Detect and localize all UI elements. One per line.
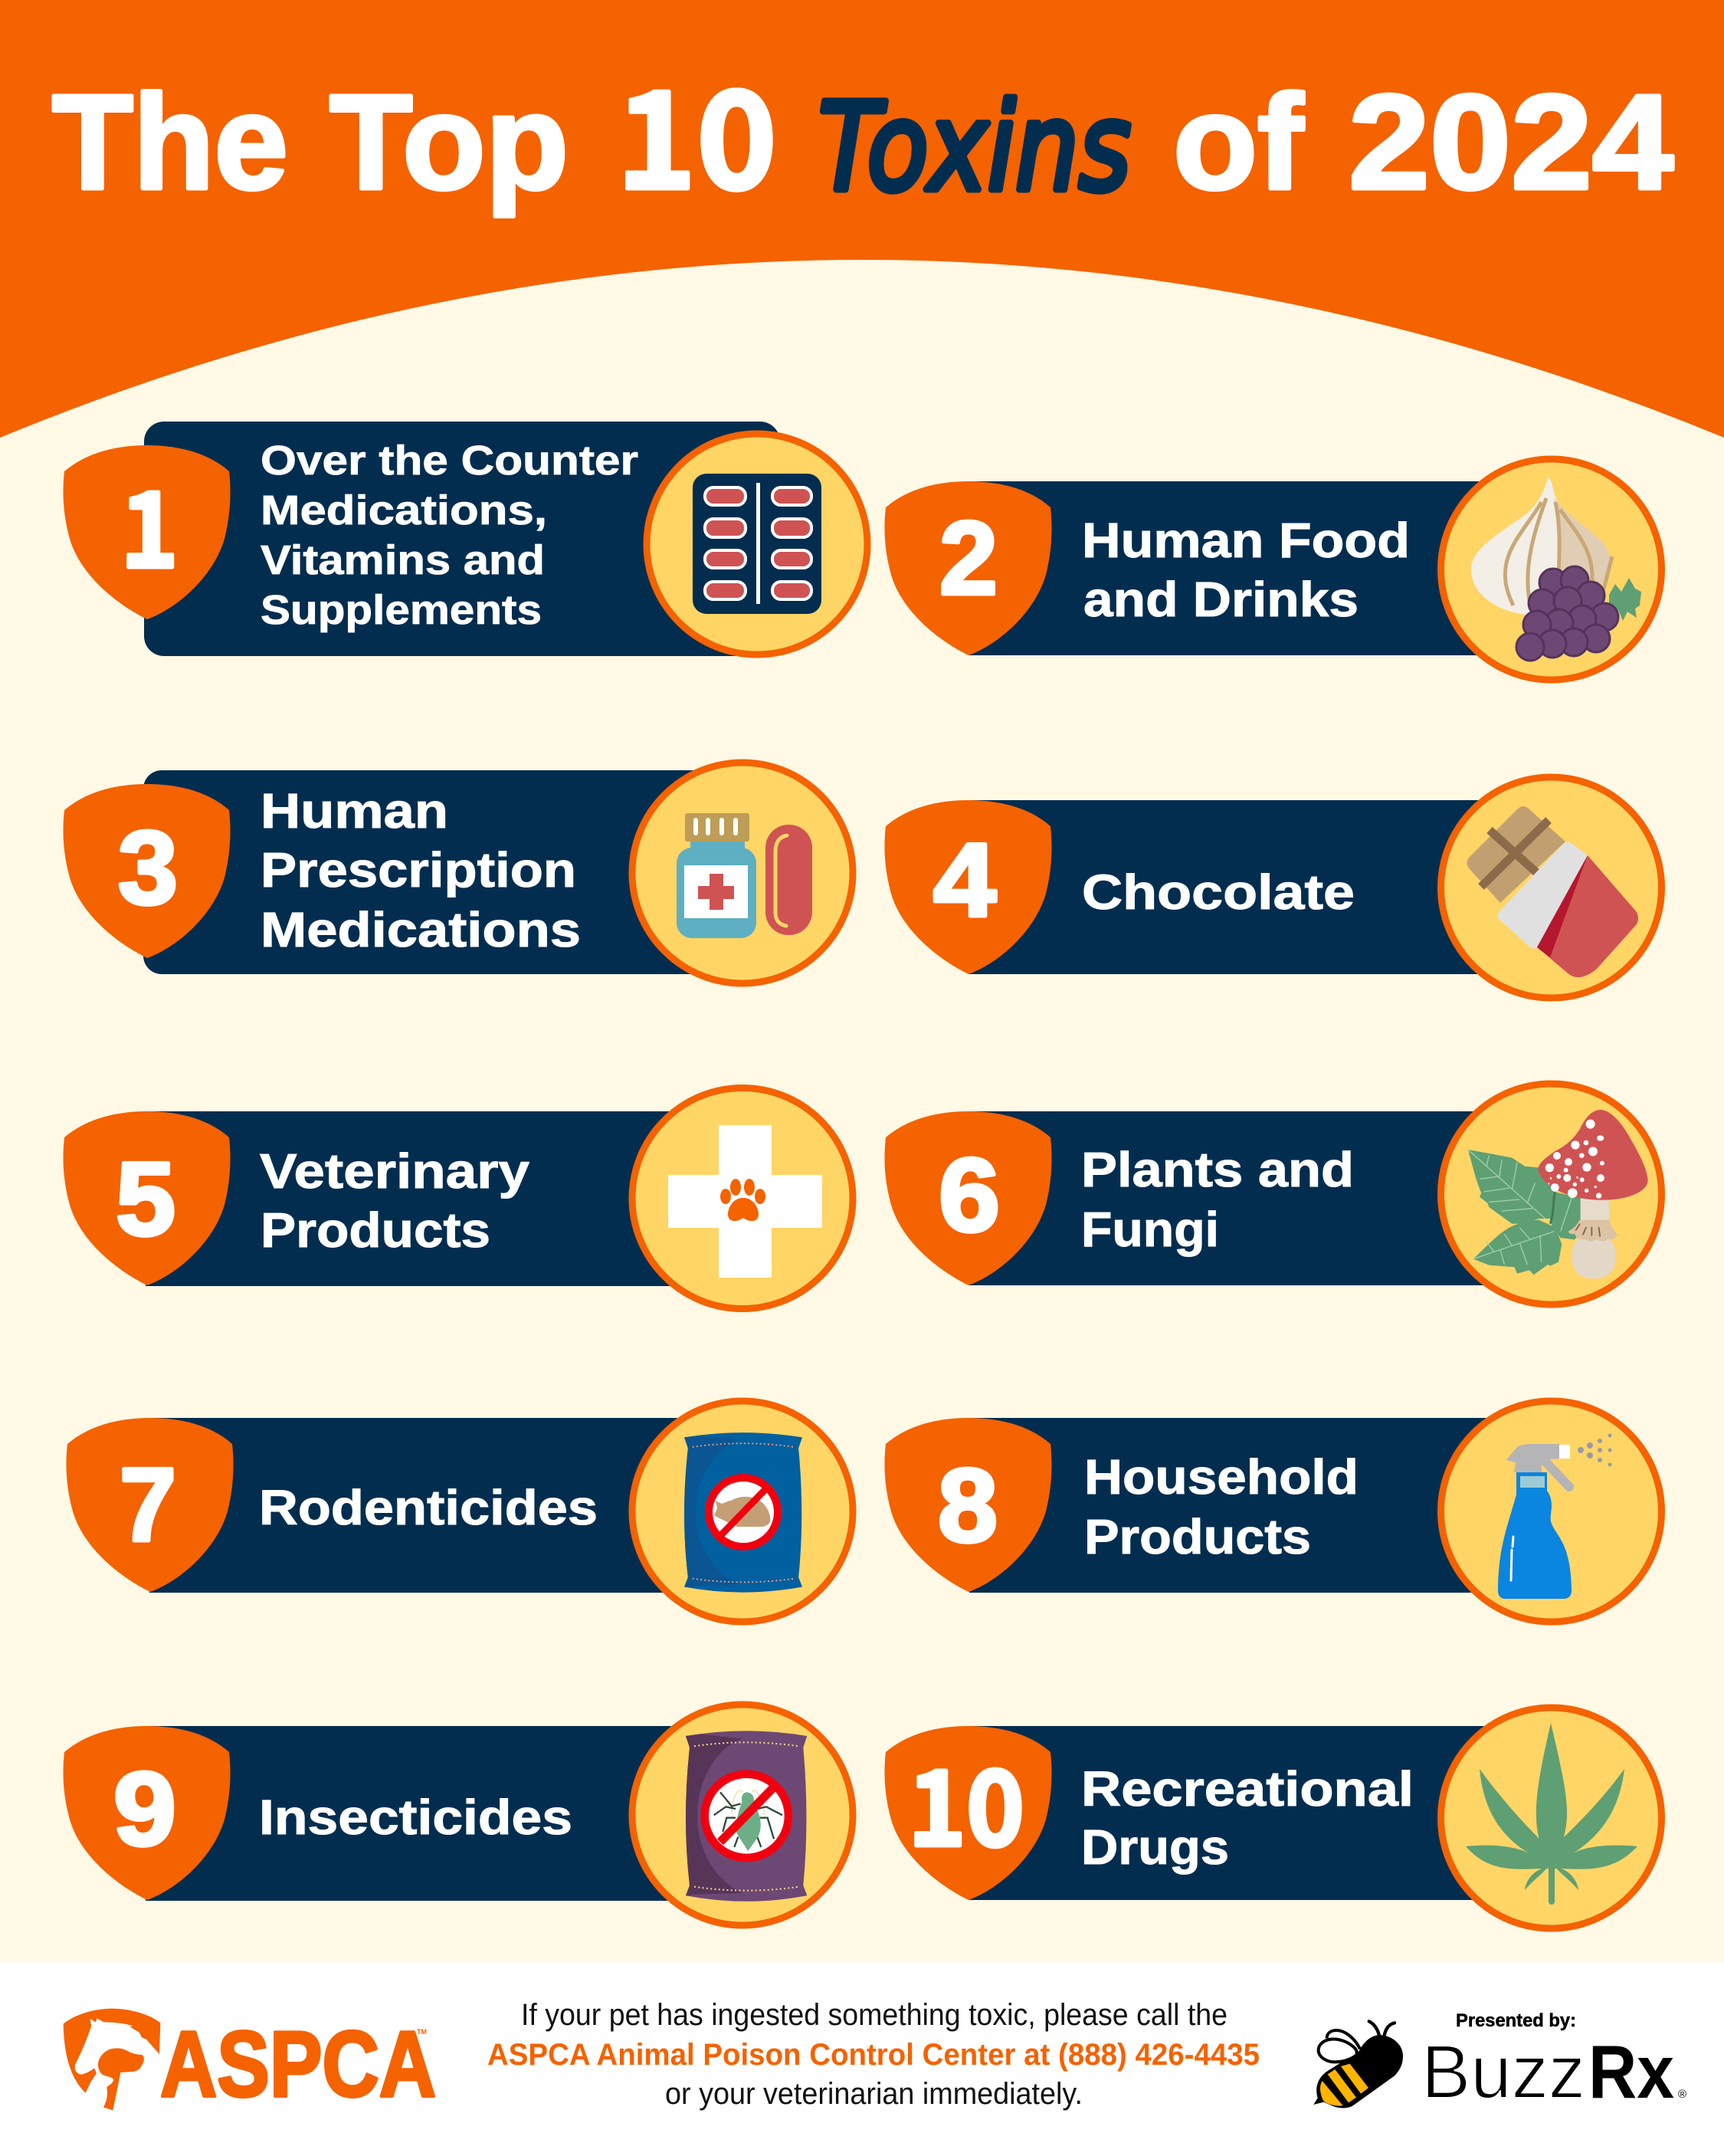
- logo: ASPCA: [64, 2009, 436, 2116]
- label text: Human Food: [1082, 513, 1410, 568]
- bar: [969, 1111, 1552, 1285]
- number shield: 1: [120, 447, 179, 598]
- number shield: [884, 1418, 1052, 1592]
- number shield: [63, 1111, 231, 1285]
- call to action text: [487, 1998, 1260, 2111]
- number shield: 3: [118, 809, 178, 926]
- bar: [969, 800, 1552, 974]
- panel: item 6 plants and fungi: [884, 1084, 1661, 1304]
- title: 2024: [1349, 67, 1673, 218]
- title: The: [52, 67, 288, 218]
- number shield: 6: [939, 1137, 1000, 1253]
- panel: item 7 rodenticides: [66, 1401, 853, 1622]
- number shield: [884, 1725, 1052, 1900]
- label text: Products: [1084, 1509, 1311, 1564]
- icon: rodent poison bag: [632, 1401, 853, 1622]
- call to action text: ASPCA Animal Poison Control Center at (888) 426-4435: [487, 2038, 1260, 2072]
- number shield: [884, 1111, 1052, 1285]
- call to action text: If your pet has ingested something toxic, please call the: [521, 1998, 1227, 2032]
- label text: Fungi: [1081, 1202, 1219, 1257]
- number shield: 7: [120, 1446, 176, 1563]
- label text: Chocolate: [1082, 865, 1355, 920]
- panel: item 4 chocolate: [884, 777, 1661, 998]
- logo: ASPCA: TM: [417, 2028, 427, 2036]
- label text: Vitamins and: [261, 537, 545, 583]
- label text: Prescription: [261, 842, 576, 898]
- bar: [146, 1726, 743, 1901]
- number shield: [63, 1726, 231, 1900]
- number shield: [884, 481, 1052, 655]
- panel: item 1 over the counter medications: [63, 422, 867, 656]
- label text: Plants and: [1081, 1142, 1354, 1197]
- call to action text: or your veterinarian immediately.: [665, 2077, 1083, 2111]
- icon: garlic and grapes: [1440, 459, 1661, 680]
- label text: Rodenticides: [259, 1480, 598, 1535]
- panel: item 5 veterinary products: [63, 1088, 853, 1309]
- logo: BuzzRx: ®: [1678, 2088, 1686, 2101]
- number shield: [884, 800, 1052, 974]
- bar: [146, 1111, 743, 1286]
- label text: [1081, 1761, 1414, 1875]
- title: 10: [616, 32, 777, 228]
- logo: BuzzRx: [1421, 2030, 1686, 2114]
- number shield: [63, 445, 231, 619]
- icon: medicine bottle and capsule: [632, 763, 853, 983]
- number shield: [66, 1418, 234, 1592]
- icon: chocolate bar: [1440, 777, 1661, 998]
- title: of: [1173, 67, 1303, 218]
- logo: ASPCA: ASPCA: [160, 2012, 436, 2116]
- title: Toxins: [818, 77, 1131, 218]
- title: [52, 32, 1673, 228]
- label text: [1084, 1449, 1359, 1564]
- label text: [261, 438, 638, 633]
- icon: pill blister pack: [647, 434, 867, 655]
- label text: [1082, 513, 1410, 627]
- label text: Human: [261, 783, 448, 838]
- label text: Medications,: [261, 487, 547, 533]
- icon: bee: [1313, 2021, 1403, 2108]
- panel: item 10 recreational drugs: [884, 1708, 1661, 1928]
- bar: [143, 770, 741, 974]
- logo: BuzzRx: Rx: [1588, 2030, 1674, 2114]
- label text: Drugs: [1081, 1820, 1229, 1875]
- panel: item 2 human food and drinks: [884, 459, 1661, 680]
- label text: and Drinks: [1083, 572, 1359, 627]
- bar: [969, 1726, 1552, 1900]
- label text: [260, 1144, 529, 1258]
- icon: cannabis leaf: [1440, 1708, 1661, 1928]
- icon: insect poison bag: [632, 1705, 853, 1925]
- number shield: 10: [908, 1725, 1024, 1876]
- label text: Supplements: [261, 587, 542, 633]
- label text: Veterinary: [260, 1144, 529, 1199]
- icon: spray bottle: [1440, 1401, 1661, 1622]
- number shield: 8: [938, 1447, 998, 1564]
- bar: [144, 422, 780, 656]
- label text: Insecticides: [259, 1790, 572, 1845]
- title: Top: [329, 67, 569, 218]
- logo: BuzzRx: Buzz: [1421, 2030, 1585, 2114]
- label text: [261, 783, 581, 957]
- number shield: 9: [113, 1751, 176, 1867]
- icon: white cross with paw: [632, 1088, 853, 1309]
- label text: [1081, 1142, 1354, 1257]
- footer panel: [0, 1962, 1724, 2156]
- sponsor text: Presented by:: [1456, 2010, 1576, 2031]
- label text: Over the Counter: [261, 438, 638, 484]
- number shield: 5: [116, 1140, 175, 1257]
- label text: Household: [1084, 1449, 1359, 1505]
- panel: item 3 human prescription medications: [63, 763, 853, 983]
- panel: item 8 household products: [884, 1401, 1661, 1622]
- bar: [149, 1418, 747, 1593]
- number shield: 2: [939, 500, 998, 616]
- bar: [969, 481, 1552, 655]
- bar: [969, 1418, 1552, 1593]
- icon: leaves and mushroom: [1440, 1084, 1661, 1304]
- number shield: [63, 784, 231, 958]
- label text: Medications: [261, 902, 581, 957]
- label text: Recreational: [1081, 1761, 1414, 1816]
- header: orange arc banner: [0, 0, 1724, 438]
- panel: item 9 insecticides: [63, 1705, 853, 1925]
- number shield: 4: [933, 822, 996, 938]
- label text: Products: [261, 1203, 490, 1258]
